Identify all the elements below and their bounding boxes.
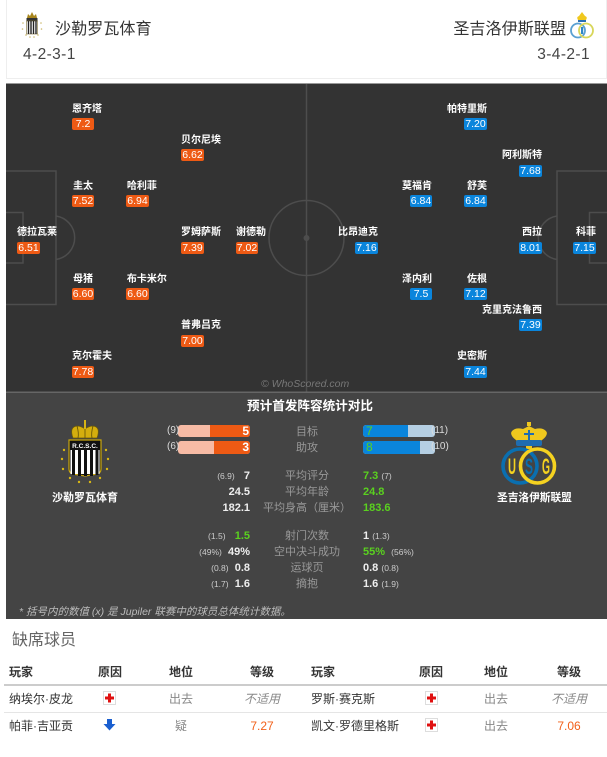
player: 谢德勒: 7.02 — [237, 242, 257, 254]
stat row: shots: (1.5) 1.5 — [208, 530, 250, 542]
stat row: average height — [222, 502, 391, 514]
table row: second absences: 帕菲·吉亚贡 — [9, 719, 73, 733]
player: 恩齐塔 — [72, 103, 102, 130]
text: home formation: 4-2-3-1 — [23, 46, 76, 63]
stat row: average height: 平均身高（厘米） — [263, 502, 351, 514]
stat row: aerial duels — [199, 546, 414, 558]
player: 贝尔尼埃: 6.62 — [182, 149, 203, 161]
icon: away team small crest — [570, 12, 594, 38]
player: 莫福肯 — [402, 180, 432, 207]
player: 舒芙: 6.84 — [465, 195, 486, 207]
player: 布卡米尔: 布卡米尔 — [127, 274, 167, 285]
table header: columns: 玩家 — [311, 665, 335, 679]
player: 罗姆萨斯: 罗姆萨斯 — [181, 227, 221, 238]
text: away team label: 圣吉洛伊斯联盟 — [497, 492, 572, 504]
player: 帕特里斯 — [447, 103, 487, 130]
player: 泽内利: 泽内利 — [402, 274, 432, 285]
table row: first absences: 出去 — [169, 692, 193, 706]
stat row: average height: 182.1 — [222, 502, 250, 514]
player: 克尔霍夫: 7.78 — [73, 366, 93, 378]
text: home goals season: (9) — [167, 425, 179, 436]
stat row: average age: 平均年龄 — [285, 486, 329, 498]
stat row: average height: 183.6 — [363, 502, 391, 514]
player: 舒芙: 舒芙 — [467, 181, 487, 192]
icon: Union Saint-Gilloise crest: U — [508, 454, 516, 479]
text: footnote: * 括号内的数值 (x) 是 Jupiler 联赛中的球员总体统计数据。 — [19, 606, 291, 618]
text: WhoScored watermark: © WhoScored.com — [261, 378, 349, 390]
player: 布卡米尔 — [126, 273, 167, 300]
icon: injury cross — [103, 691, 116, 705]
player: 谢德勒: 谢德勒 — [236, 227, 266, 238]
player: 西拉: 8.01 — [520, 242, 541, 254]
bar: away assists: 8 — [366, 440, 373, 454]
player: 圭太: 7.52 — [73, 195, 93, 207]
text: away assists season: (10) — [431, 441, 449, 452]
player: 莫福肯: 6.84 — [411, 195, 431, 207]
text: home team label: 沙勒罗瓦体育 — [52, 492, 118, 504]
player: 比昂迪克: 7.16 — [356, 242, 377, 254]
player: 佐根 — [464, 273, 487, 300]
stat row: shots: 1 (1.3) — [363, 530, 390, 542]
player: 比昂迪克: 比昂迪克 — [338, 227, 378, 238]
panel: lineup stats comparison — [6, 393, 607, 619]
table header: columns: 地位 — [169, 665, 193, 679]
icon: home team small crest — [22, 12, 42, 38]
table row: second absences: 7.27 — [250, 719, 274, 733]
player: 科菲: 7.15 — [574, 242, 595, 254]
text: away formation: 3-4-2-1 — [537, 46, 590, 63]
player: 史密斯: 史密斯 — [457, 351, 487, 362]
player: 哈利菲 — [126, 180, 157, 207]
icon: injury cross second row — [425, 718, 438, 732]
heading: home team name: 沙勒罗瓦体育 — [55, 20, 152, 38]
player: 罗姆萨斯: 7.39 — [182, 242, 203, 254]
text: away goals season: (11) — [431, 425, 448, 436]
table header: columns: 玩家 — [9, 665, 33, 679]
table header: columns: 原因 — [419, 665, 443, 679]
player: 德拉瓦莱: 6.51 — [18, 242, 39, 254]
player: 普弗吕克: 普弗吕克 — [181, 320, 221, 331]
stat row: average age: 24.5 — [229, 486, 250, 498]
player: 佐根: 佐根 — [467, 274, 487, 285]
player: 泽内利 — [402, 273, 432, 300]
chart: football pitch background — [6, 83, 607, 393]
player: 谢德勒 — [236, 226, 266, 254]
table header: columns: 地位 — [484, 665, 508, 679]
table row: second absences: 7.06 — [557, 719, 581, 733]
stat row: shots — [208, 530, 390, 542]
player: 恩齐塔: 恩齐塔 — [72, 104, 102, 115]
player: 西拉: 西拉 — [522, 227, 542, 238]
stat row: tackles: 1.6 (1.9) — [363, 578, 399, 590]
player: 阿利斯特 — [502, 149, 542, 177]
text: assists label: 助攻 — [296, 442, 318, 454]
stat row: aerial duels: 空中决斗成功 — [274, 546, 340, 558]
icon: Charleroi crest: R.C.S.C. — [72, 443, 98, 450]
stat row: dribbles — [211, 562, 399, 574]
player: 阿利斯特: 7.68 — [520, 165, 541, 177]
icon: Union Saint-Gilloise crest — [501, 422, 556, 485]
player: 母猪: 6.60 — [73, 288, 93, 300]
player: 圭太: 圭太 — [73, 181, 93, 192]
stat row: tackles: (1.7) 1.6 — [211, 578, 250, 590]
table row: second absences: 凯文·罗德里格斯 — [311, 719, 399, 733]
bar: away goals — [363, 425, 435, 437]
stat row: average rating — [217, 470, 392, 482]
stat row: average rating: 平均评分 — [285, 470, 329, 482]
stat row: shots: 射门次数 — [285, 530, 329, 542]
player: 史密斯 — [457, 350, 487, 378]
icon: blue down arrow — [104, 719, 116, 730]
table row: second absences: 疑 — [175, 719, 187, 733]
player: 克尔霍夫 — [72, 350, 112, 378]
player: 贝尔尼埃 — [181, 134, 221, 161]
table row: first absences: 不适用 — [551, 692, 587, 706]
table row: first absences: 纳埃尔·皮龙 — [9, 692, 73, 706]
table row: second absences — [9, 718, 581, 733]
heading: missing players: 缺席球员 — [12, 632, 76, 649]
table row: first absences: 出去 — [484, 692, 508, 706]
player: 科菲: 科菲 — [576, 227, 596, 238]
player: 莫福肯: 莫福肯 — [402, 181, 432, 192]
heading: stats title: 预计首发阵容统计对比 — [247, 399, 373, 413]
player: 普弗吕克: 7.00 — [182, 335, 203, 347]
bar: home goals — [178, 425, 250, 437]
bar: home goals: 5 — [242, 424, 249, 438]
icon: Charleroi crest — [60, 420, 110, 484]
stat row: aerial duels: (49%) 49% — [199, 546, 250, 558]
bar: home assists: 3 — [242, 440, 249, 454]
stat row: average age — [229, 486, 384, 498]
player: 普弗吕克 — [181, 319, 221, 347]
player: 克里克法鲁西: 7.39 — [520, 319, 541, 331]
stat row: dribbles: 运球页 — [290, 562, 324, 574]
table row: first absences: 罗斯·赛克斯 — [311, 692, 375, 706]
player: 科菲 — [573, 226, 596, 254]
player: 西拉 — [519, 226, 542, 254]
player: 克里克法鲁西 — [482, 304, 542, 331]
table row: first absences — [4, 691, 607, 713]
text: home assists season: (6) — [167, 441, 179, 452]
player: 母猪: 母猪 — [73, 274, 93, 285]
panel: match header — [6, 0, 607, 79]
icon: Union Saint-Gilloise crest: S — [525, 454, 533, 479]
icon: Union Saint-Gilloise crest: G — [542, 454, 550, 479]
player: 哈利菲: 6.94 — [127, 195, 148, 207]
bar: home assists — [178, 441, 250, 454]
stat row: average rating: (6.9) 7 — [217, 470, 250, 482]
player: 比昂迪克 — [338, 226, 378, 254]
heading: away team name: 圣吉洛伊斯联盟 — [453, 20, 566, 38]
player: 圭太 — [72, 180, 94, 207]
player: 帕特里斯: 7.20 — [465, 118, 486, 130]
stat row: aerial duels: 55% (56%) — [363, 546, 414, 558]
stat row: average age: 24.8 — [363, 486, 384, 498]
bar: away goals: 7 — [366, 424, 373, 438]
table header: columns: 原因 — [98, 665, 122, 679]
icon: injury cross right — [425, 691, 438, 705]
stat row: dribbles: (0.8) 0.8 — [211, 562, 250, 574]
player: 贝尔尼埃: 贝尔尼埃 — [181, 135, 221, 146]
stat row: average rating: 7.3 (7) — [363, 470, 392, 482]
player: 母猪 — [72, 273, 94, 300]
table row: first absences: 不适用 — [244, 692, 280, 706]
player: 德拉瓦莱: 德拉瓦莱 — [17, 227, 57, 238]
player: 哈利菲: 哈利菲 — [127, 181, 157, 192]
stat row: dribbles: 0.8 (0.8) — [363, 562, 399, 574]
stat row: tackles: 摘抱 — [296, 578, 318, 590]
player: 佐根: 7.12 — [465, 288, 486, 300]
player: 罗姆萨斯 — [181, 226, 221, 254]
player: 舒芙 — [464, 180, 487, 207]
table header: columns: 等级 — [557, 665, 581, 679]
player: 泽内利: 7.5 — [414, 288, 428, 300]
text: goals label: 目标 — [296, 426, 318, 438]
player: 布卡米尔: 6.60 — [127, 288, 148, 300]
table row: second absences: 出去 — [484, 719, 508, 733]
bar: away assists — [363, 441, 435, 454]
player: 史密斯: 7.44 — [465, 366, 486, 378]
stat row: tackles — [211, 578, 399, 590]
player: 恩齐塔: 7.2 — [76, 118, 90, 130]
player: 帕特里斯: 帕特里斯 — [447, 104, 487, 115]
player: 阿利斯特: 阿利斯特 — [502, 150, 542, 161]
table header: columns: 等级 — [250, 665, 274, 679]
player: 克尔霍夫: 克尔霍夫 — [72, 351, 112, 362]
player: 克里克法鲁西: 克里克法鲁西 — [482, 305, 542, 316]
player: 德拉瓦莱 — [17, 226, 57, 254]
